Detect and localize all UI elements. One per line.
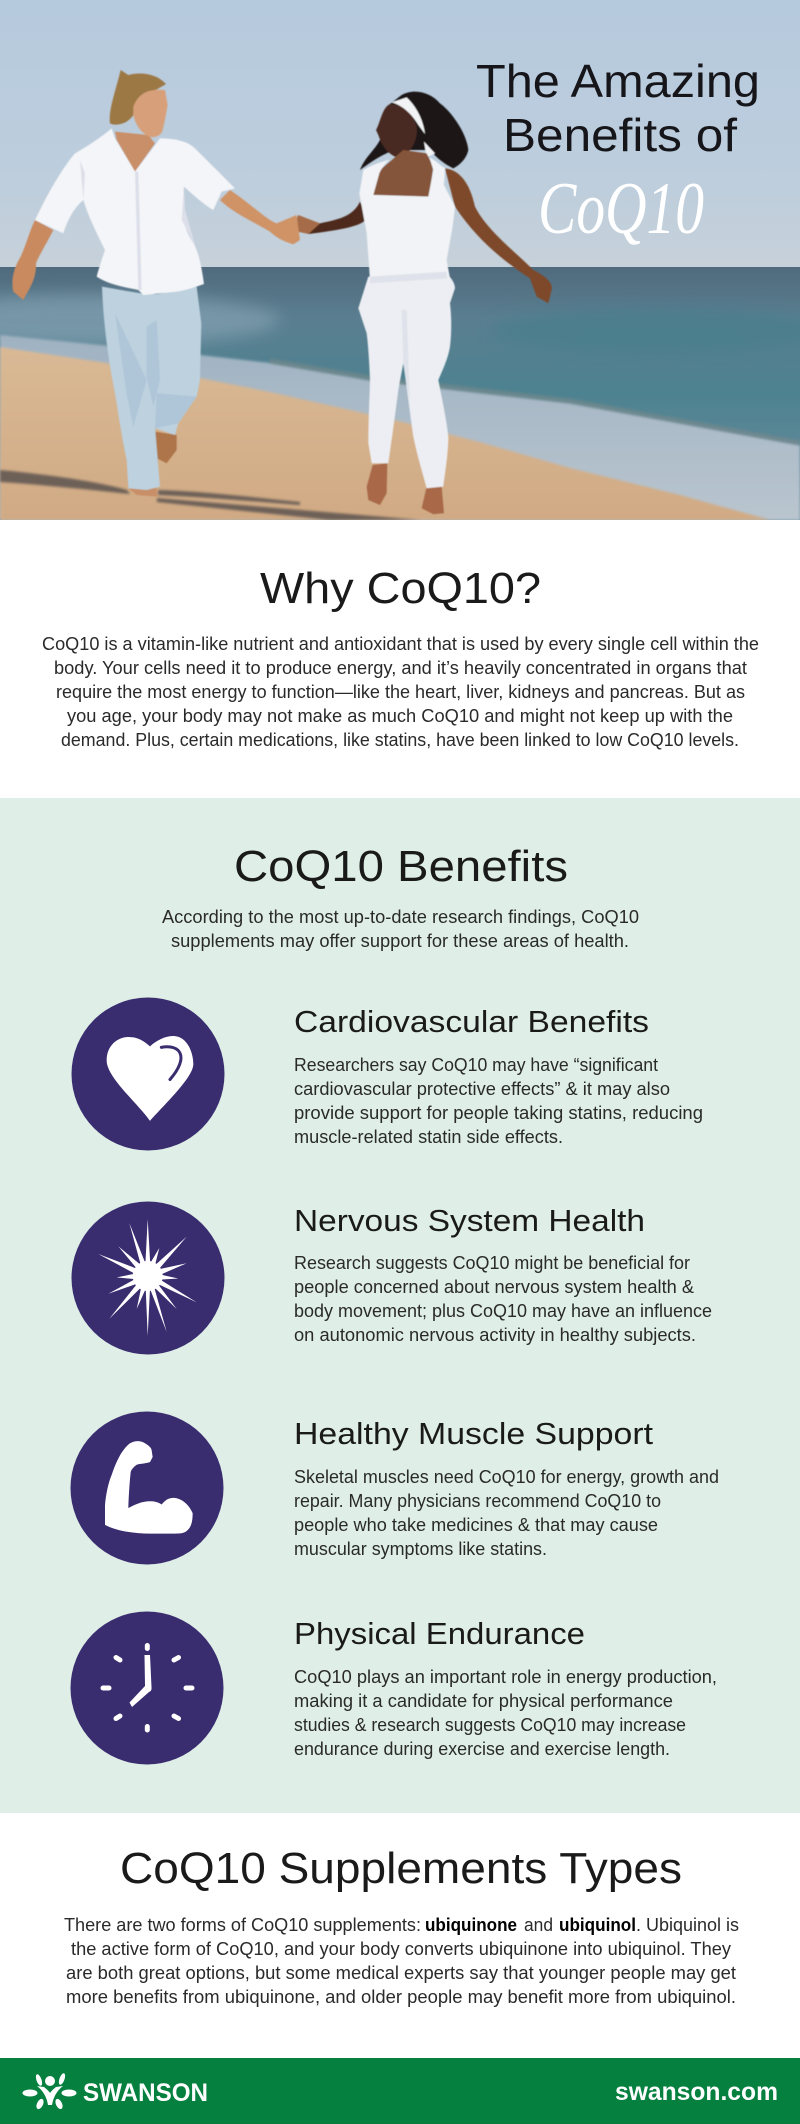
heading: CoQ10 Benefits: CoQ10 Benefits (234, 842, 568, 891)
text block: benefits intro: supplements may offer support for these areas of health. (171, 931, 629, 951)
card: healthy muscle support: Skeletal muscles need CoQ10 for energy, growth and (294, 1467, 719, 1487)
card: physical endurance: Physical Endurance (294, 1616, 585, 1651)
text block: supplement types paragraph: are both great options, but some medical experts say that younger people may get (66, 1963, 736, 1983)
card: healthy muscle support: Healthy Muscle Support (294, 1416, 653, 1451)
text block: supplement types paragraph: the active form of CoQ10, and your body converts ubiquinone into ubiquinol. They (71, 1939, 731, 1959)
card: nervous system health: body movement; plus CoQ10 may have an influence (294, 1301, 712, 1321)
card: nervous system health (294, 1203, 712, 1345)
card: cardiovascular benefits: Cardiovascular Benefits (294, 1004, 649, 1039)
text block: supplement types paragraph (64, 1915, 739, 2007)
text block: why CoQ10 paragraph: you age, your body may not make as much CoQ10 and might not keep up with the (67, 706, 733, 726)
text block: why CoQ10 paragraph: demand. Plus, certain medications, like statins, have been linked to low CoQ10 levels. (61, 730, 739, 750)
card: cardiovascular benefits: provide support for people taking statins, reducing (294, 1103, 703, 1123)
footer bar (0, 2058, 800, 2124)
card: healthy muscle support: repair. Many physicians recommend CoQ10 to (294, 1491, 661, 1511)
title: The Amazing Benefits of CoQ10: CoQ10 (538, 168, 704, 250)
text block: supplement types paragraph: and (524, 1915, 553, 1935)
card: healthy muscle support: people who take medicines & that may cause (294, 1515, 658, 1535)
title: The Amazing Benefits of CoQ10: The Amazing (476, 55, 760, 107)
panel: CoQ10 benefits (0, 798, 800, 1813)
card: physical endurance (294, 1616, 717, 1759)
card: nervous system health: Nervous System Health (294, 1203, 645, 1238)
card: cardiovascular benefits (294, 1004, 703, 1147)
card: cardiovascular benefits: Researchers say CoQ10 may have “significant (294, 1055, 658, 1075)
text block: supplement types paragraph: ubiquinol (559, 1915, 636, 1935)
text block: supplement types paragraph: . Ubiquinol is (636, 1915, 739, 1935)
man figure (12, 70, 300, 497)
card: cardiovascular benefits: cardiovascular protective effects” & it may also (294, 1079, 670, 1099)
text block: supplement types paragraph: ubiquinone (425, 1915, 517, 1935)
text block: why CoQ10 paragraph: require the most energy to function—like the heart, liver, kidneys and pancreas. But as (56, 682, 745, 702)
card: physical endurance: CoQ10 plays an important role in energy production, (294, 1667, 717, 1687)
icon: nerve starburst (72, 1202, 224, 1354)
heading: Why CoQ10?: Why CoQ10? (260, 564, 541, 613)
icon: heart (72, 998, 224, 1150)
text block: why CoQ10 paragraph: body. Your cells need it to produce energy, and it’s heavily concentrated in organs that (54, 658, 747, 678)
card: physical endurance: endurance during exercise and exercise length. (294, 1739, 670, 1759)
icon: flexed arm (70, 1412, 224, 1564)
card: healthy muscle support (294, 1416, 719, 1559)
heading: CoQ10 Supplements Types: CoQ10 Supplements Types (120, 1844, 682, 1893)
hero photo: couple running on beach (0, 0, 800, 520)
text block: benefits intro (162, 907, 639, 951)
website: swanson.com: swanson.com (615, 2078, 778, 2106)
card: nervous system health: Research suggests CoQ10 might be beneficial for (294, 1253, 690, 1273)
logo: Swanson: SWANSON (83, 2079, 208, 2107)
text block: supplement types paragraph: more benefits from ubiquinone, and older people may benefit more from ubiquinol. (66, 1987, 736, 2007)
card: healthy muscle support: muscular symptoms like statins. (294, 1539, 547, 1559)
text block: why CoQ10 paragraph: CoQ10 is a vitamin-like nutrient and antioxidant that is used by every single cell within the (42, 634, 759, 654)
title: The Amazing Benefits of CoQ10: Benefits of (503, 109, 737, 161)
text block: benefits intro: According to the most up-to-date research findings, CoQ10 (162, 907, 639, 927)
card: physical endurance: making it a candidate for physical performance (294, 1691, 673, 1711)
card: physical endurance: studies & research suggests CoQ10 may increase (294, 1715, 686, 1735)
card: nervous system health: people concerned about nervous system health & (294, 1277, 694, 1297)
title: The Amazing Benefits of CoQ10 (476, 55, 760, 250)
text block: why CoQ10 paragraph (42, 634, 759, 750)
logo: Swanson (22, 2073, 208, 2110)
text block: supplement types paragraph: There are two forms of CoQ10 supplements: (64, 1915, 421, 1935)
woman figure (290, 92, 552, 514)
card: nervous system health: on autonomic nervous activity in healthy subjects. (294, 1325, 696, 1345)
card: cardiovascular benefits: muscle-related statin side effects. (294, 1127, 563, 1147)
icon: clock (70, 1612, 224, 1764)
